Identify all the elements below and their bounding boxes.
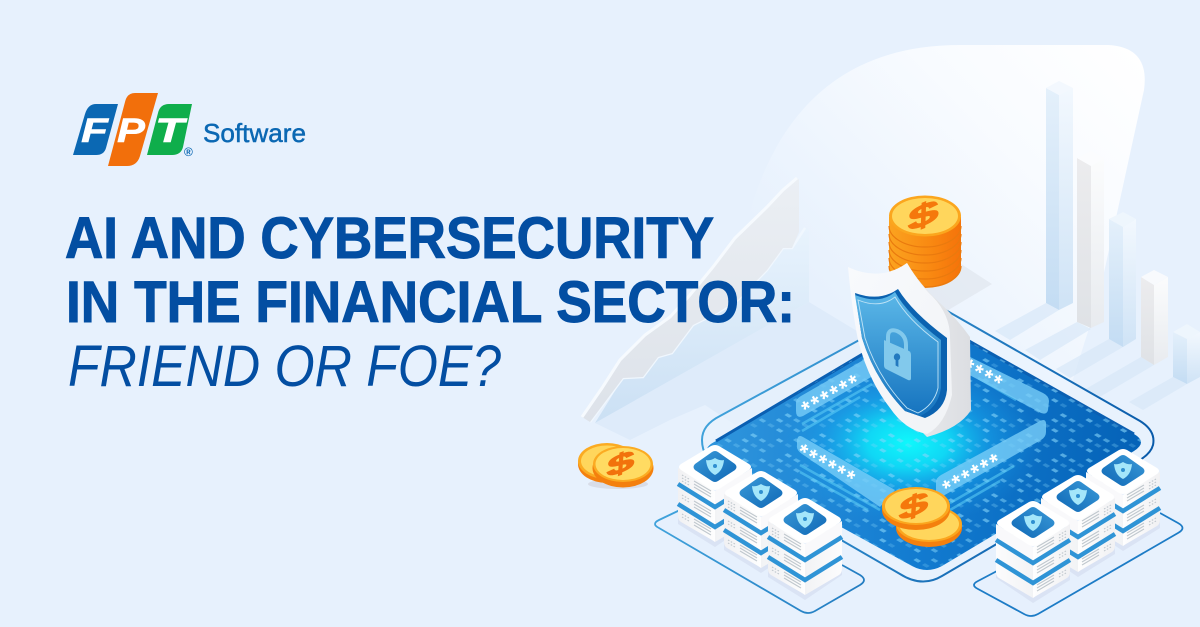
white glow panel — [745, 45, 1145, 420]
password panel: bottom right: ****** — [938, 447, 1007, 500]
data platform — [702, 305, 1153, 582]
title line 1: AI AND CYBERSECURITY — [65, 206, 714, 271]
logo wordmark: Software — [203, 118, 306, 148]
server rack: right 3 — [1086, 449, 1160, 551]
registered mark: ® — [184, 145, 193, 159]
logo: FPT Software — [73, 93, 306, 166]
platform blue surface — [707, 320, 1141, 570]
platform edge — [716, 320, 1134, 441]
padlock icon — [884, 330, 911, 380]
coins: left pair — [578, 443, 654, 489]
password panel: bottom left: ****** — [793, 439, 861, 492]
shield blue face — [855, 292, 941, 416]
server group base outline: left — [655, 510, 864, 613]
logo mark: orange tile P — [108, 93, 158, 166]
logo mark: green tile T — [147, 104, 192, 155]
server rack: left 3 — [768, 498, 842, 600]
shield blue dark rim — [855, 289, 947, 418]
logo mark: orange tile P: P — [117, 112, 145, 150]
server rack: left 2 — [724, 471, 798, 573]
server rack: right 1 — [996, 501, 1070, 603]
title line 2: IN THE FINANCIAL SECTOR: — [66, 270, 795, 335]
coins: front pair: $ — [898, 483, 930, 528]
password panel: bottom right — [936, 420, 1046, 500]
coin stack — [889, 192, 992, 312]
circuit lines under panels — [800, 378, 1016, 510]
coin stack: $ — [907, 192, 939, 240]
shield thin inner line — [858, 297, 938, 413]
password panel: top right: **** — [959, 354, 1008, 396]
platform outline — [702, 305, 1153, 582]
central cyan glow — [773, 361, 1043, 525]
title line 3: FRIEND OR FOE? — [68, 334, 501, 399]
coins: left pair: $ — [606, 443, 636, 484]
coins: front pair — [882, 483, 962, 547]
password panel: top left: ****** — [797, 368, 866, 421]
logo mark: green tile T: T — [155, 112, 188, 150]
server group base outline: right — [974, 513, 1182, 616]
shield with padlock — [848, 263, 971, 437]
password panel: bottom left — [793, 436, 895, 507]
shield white front — [848, 263, 952, 434]
background line chart — [582, 178, 885, 440]
server rack: left 1 — [678, 445, 752, 547]
password panel: top right — [959, 352, 1049, 414]
logo mark: blue tile F: F — [81, 112, 110, 150]
shield grey side — [860, 263, 971, 437]
logo mark: blue tile F — [73, 104, 118, 155]
title — [65, 206, 795, 399]
password panel: top left — [796, 350, 880, 421]
server rack: right 2 — [1041, 475, 1115, 577]
background bar chart — [995, 81, 1200, 410]
platform data dots — [707, 320, 1141, 570]
